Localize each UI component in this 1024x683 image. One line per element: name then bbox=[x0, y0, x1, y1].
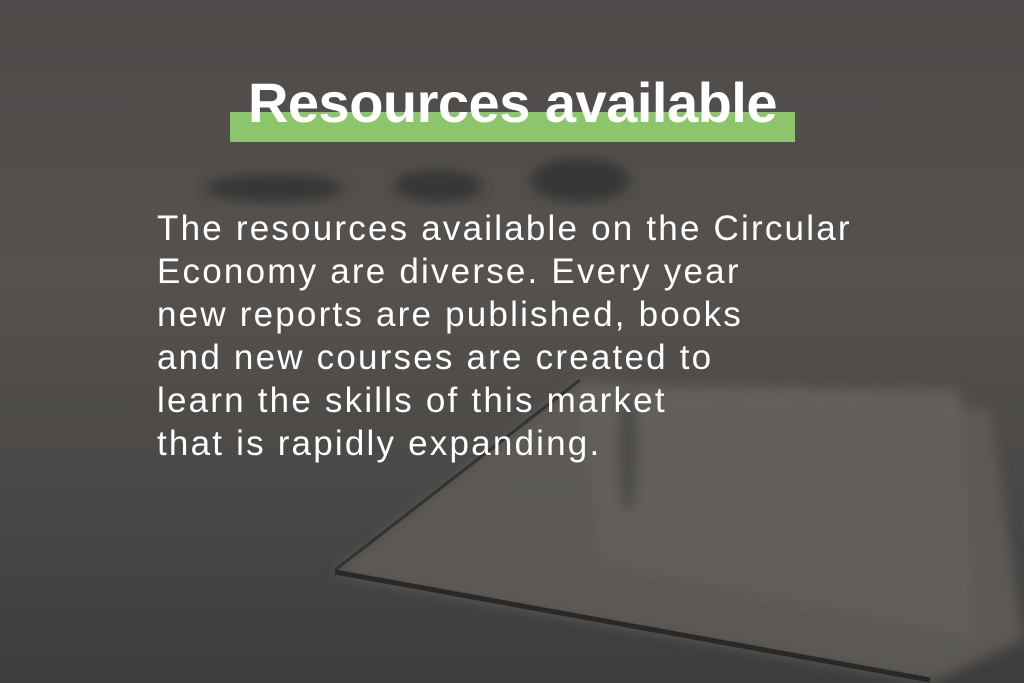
body text: The resources available on the Circular bbox=[157, 209, 852, 248]
body text: that is rapidly expanding. bbox=[157, 424, 601, 463]
body text: new reports are published, books bbox=[157, 295, 743, 334]
body text bbox=[157, 209, 852, 463]
notebook bbox=[335, 380, 1024, 683]
body text: Economy are diverse. Every year bbox=[157, 252, 741, 291]
body text: and new courses are created to bbox=[157, 338, 713, 377]
highlight bar bbox=[230, 112, 795, 142]
title bbox=[230, 71, 795, 142]
plants bbox=[205, 158, 630, 202]
title text: Resources available bbox=[248, 71, 777, 134]
body text: learn the skills of this market bbox=[157, 381, 667, 420]
